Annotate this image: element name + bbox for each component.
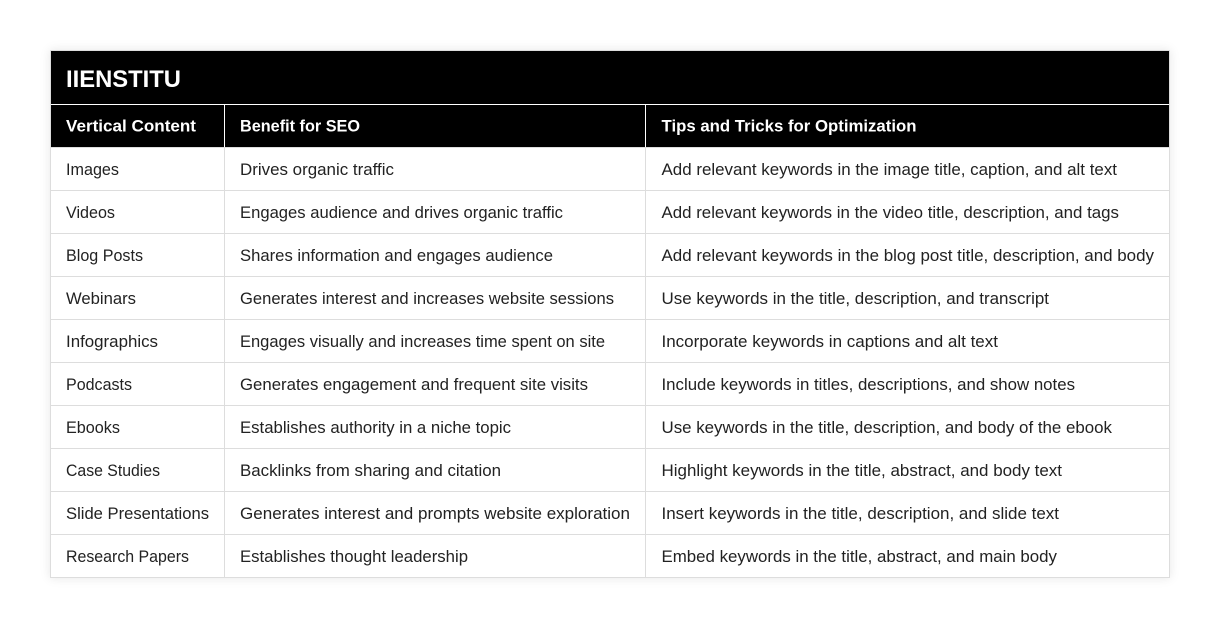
row: Infographics bbox=[66, 333, 998, 351]
row: Ebooks: Ebooks bbox=[66, 419, 120, 437]
row: Case Studies: Case Studies bbox=[66, 462, 160, 480]
row: Research Papers: Embed keywords in the title, abstract, and main body bbox=[662, 548, 1058, 566]
title: IIENSTITU bbox=[66, 66, 181, 93]
row: Videos: Engages audience and drives organic traffic bbox=[240, 204, 563, 222]
row: Videos bbox=[66, 204, 1119, 222]
row: Images bbox=[66, 161, 1117, 179]
row: Webinars bbox=[66, 290, 1049, 308]
row: Images: Images bbox=[66, 161, 119, 179]
row: Ebooks: Use keywords in the title, description, and body of the ebook bbox=[662, 419, 1113, 437]
row: Research Papers: Research Papers bbox=[66, 548, 189, 566]
row: Webinars: Generates interest and increases website sessions bbox=[240, 290, 614, 308]
row: Infographics: Incorporate keywords in captions and alt text bbox=[662, 333, 998, 351]
row: Images: Drives organic traffic bbox=[240, 161, 394, 179]
row: Videos: Add relevant keywords in the video title, description, and tags bbox=[662, 204, 1119, 222]
row: Slide Presentations: Generates interest and prompts website exploration bbox=[240, 505, 630, 523]
header row: Benefit for SEO bbox=[240, 118, 360, 136]
row: Podcasts: Podcasts bbox=[66, 376, 132, 394]
row: Case Studies: Backlinks from sharing and citation bbox=[240, 462, 501, 480]
row: Slide Presentations bbox=[66, 505, 1059, 523]
row: Research Papers bbox=[66, 548, 1058, 566]
row: Infographics: Engages visually and increases time spent on site bbox=[240, 333, 605, 351]
row: Webinars: Webinars bbox=[66, 290, 136, 308]
row: Slide Presentations: Slide Presentations bbox=[66, 505, 209, 523]
header row: Tips and Tricks for Optimization bbox=[662, 118, 916, 136]
row: Webinars: Use keywords in the title, description, and transcript bbox=[662, 290, 1049, 308]
row: Infographics: Infographics bbox=[66, 333, 158, 351]
row: Blog Posts bbox=[66, 247, 1155, 265]
row: Blog Posts: Shares information and engages audience bbox=[240, 247, 553, 265]
row: Slide Presentations: Insert keywords in the title, description, and slide text bbox=[662, 505, 1059, 523]
row: Blog Posts: Blog Posts bbox=[66, 247, 143, 265]
row: Podcasts: Generates engagement and frequent site visits bbox=[240, 376, 588, 394]
row: Case Studies bbox=[66, 462, 1062, 480]
table card bbox=[50, 50, 1170, 578]
header row bbox=[66, 118, 916, 136]
row: Ebooks: Establishes authority in a niche topic bbox=[240, 419, 511, 437]
row: Blog Posts: Add relevant keywords in the blog post title, description, and body bbox=[662, 247, 1155, 265]
row: Ebooks bbox=[66, 419, 1113, 437]
row: Images: Add relevant keywords in the image title, caption, and alt text bbox=[662, 161, 1117, 179]
row: Research Papers: Establishes thought leadership bbox=[240, 548, 468, 566]
row: Videos: Videos bbox=[66, 204, 115, 222]
header row: Vertical Content bbox=[66, 118, 197, 136]
row: Podcasts bbox=[66, 376, 1075, 394]
row: Podcasts: Include keywords in titles, descriptions, and show notes bbox=[662, 376, 1075, 394]
row: Case Studies: Highlight keywords in the title, abstract, and body text bbox=[662, 462, 1062, 480]
